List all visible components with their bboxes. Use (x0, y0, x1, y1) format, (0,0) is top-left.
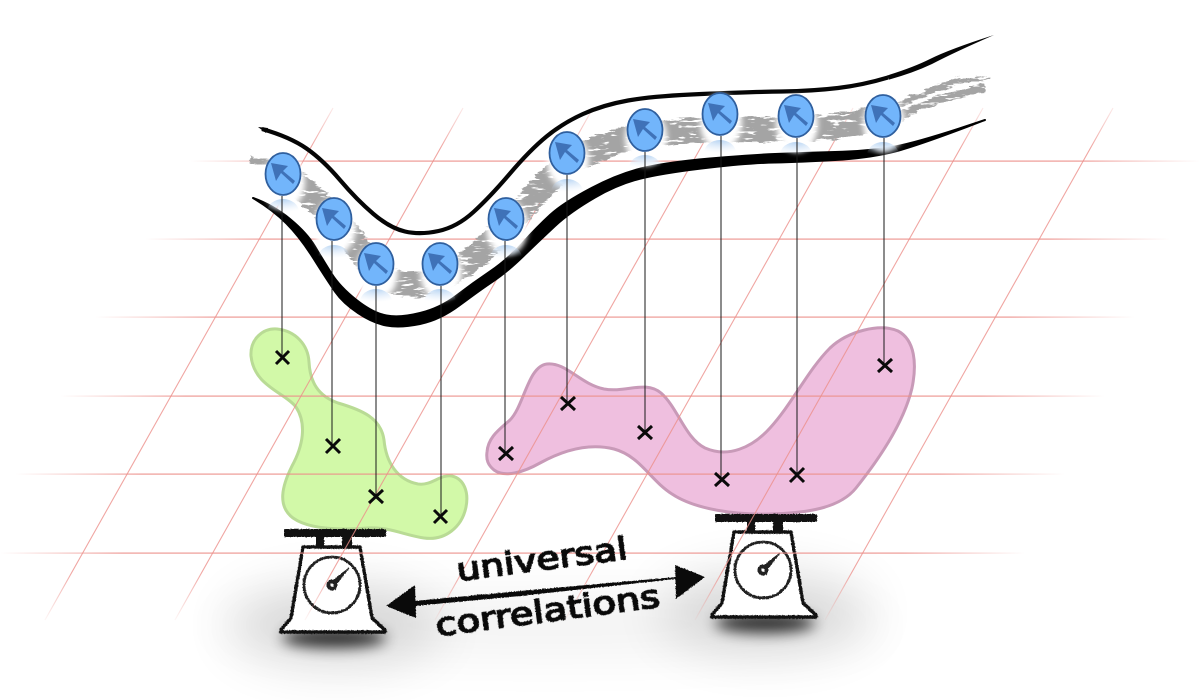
label: correlations: correlations (433, 579, 662, 644)
point reflections (267, 140, 899, 302)
grey trajectory band (250, 78, 990, 284)
white halos around points (263, 94, 905, 300)
pink blob (487, 328, 914, 514)
label: universal: universal (454, 531, 630, 589)
left scale (281, 529, 386, 632)
right scale (712, 514, 817, 617)
upper black curve (258, 35, 994, 233)
cross markers (276, 351, 892, 523)
double-headed arrow (386, 565, 705, 618)
green blob (251, 329, 467, 538)
projection lines (282, 136, 884, 516)
perspective grid (0, 108, 1200, 620)
chain of blue points with arrows (266, 93, 900, 285)
lower thick black curve (253, 120, 985, 326)
bottom shadows (210, 572, 890, 665)
